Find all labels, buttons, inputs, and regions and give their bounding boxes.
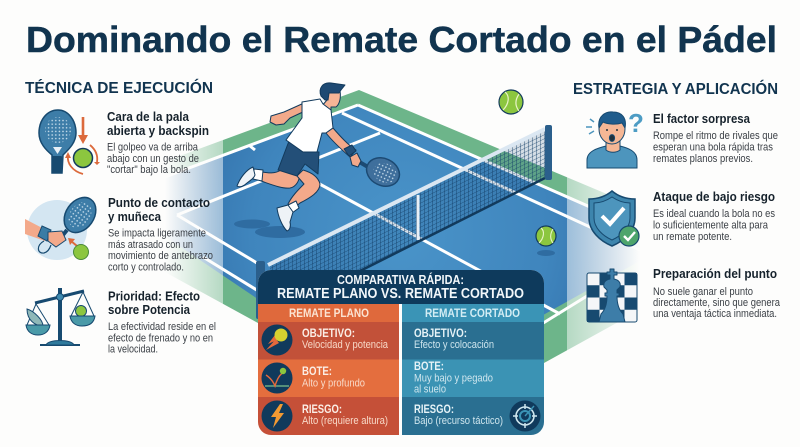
text: preparación del punto: Preparación del punto bbox=[653, 266, 777, 281]
icon: balance scale bbox=[26, 288, 95, 345]
racket bbox=[356, 153, 404, 191]
text: el factor sorpresa: Rompe el ritmo de rivales que bbox=[653, 130, 778, 142]
text: cara de la pala: El golpeo va de arriba bbox=[107, 142, 199, 154]
row: riesgo cortado: Bajo (recurso táctico) bbox=[414, 415, 503, 427]
row: bote cortado: al suelo bbox=[414, 384, 446, 396]
text: prioridad: efecto de frenado y no en bbox=[108, 332, 213, 344]
panel: comparison table bbox=[258, 270, 544, 435]
text: preparación del punto: una ventaja táctica inmediata. bbox=[653, 308, 777, 320]
hand bbox=[350, 153, 361, 167]
back leg bbox=[261, 170, 299, 188]
text: cara de la pala: "cortar" bajo la bola. bbox=[107, 164, 191, 176]
hair bbox=[320, 83, 345, 100]
wristband bbox=[344, 145, 356, 156]
icon: shield with check bbox=[589, 191, 639, 246]
panel heading: REMATE PLANO VS. REMATE CORTADO bbox=[277, 286, 524, 302]
court background bbox=[170, 90, 634, 363]
row: riesgo cortado: RIESGO: bbox=[414, 404, 454, 416]
row: objetivo plano: OBJETIVO: bbox=[302, 328, 355, 340]
row: riesgo plano bbox=[262, 400, 388, 432]
text: cara de la pala: abajo con un gesto de bbox=[107, 153, 199, 165]
icon: racket and backspin bbox=[39, 110, 100, 174]
icon: contact point and wrist bbox=[25, 191, 102, 260]
text: punto de contacto: Se impacta ligeramente bbox=[108, 228, 206, 240]
text: prioridad bbox=[108, 288, 216, 356]
neck and face bbox=[321, 90, 340, 112]
row: bote cortado: BOTE: bbox=[414, 361, 444, 373]
text: el factor sorpresa: El factor sorpresa bbox=[653, 111, 751, 126]
panel heading bbox=[277, 272, 524, 302]
text: ataque de bajo riesgo bbox=[653, 189, 775, 243]
title: Dominando el Remate Cortado en el Pádel bbox=[26, 19, 777, 60]
player shadow bbox=[234, 220, 305, 238]
row: bote cortado bbox=[414, 361, 493, 396]
row: objetivo plano bbox=[262, 324, 389, 356]
text: prioridad: la velocidad. bbox=[108, 344, 158, 356]
row: bote plano: BOTE: bbox=[302, 366, 332, 378]
text: punto de contacto: movimiento de antebrazo bbox=[108, 250, 213, 262]
row: bote plano bbox=[262, 362, 365, 394]
front leg bbox=[288, 170, 320, 208]
back arm bbox=[270, 103, 305, 125]
text: el factor sorpresa: remates planos previos. bbox=[653, 153, 753, 165]
heading: técnica de ejecución: TÉCNICA DE EJECUCIÓN bbox=[25, 79, 213, 97]
shirt bbox=[286, 99, 333, 152]
shorts bbox=[278, 141, 319, 176]
icon: surprised person bbox=[586, 108, 644, 168]
net bbox=[256, 125, 552, 319]
row: bote plano: Alto y profundo bbox=[302, 378, 365, 390]
player bbox=[237, 83, 404, 231]
text: prioridad: La efectividad reside en el bbox=[108, 321, 216, 333]
text: punto de contacto bbox=[108, 195, 213, 274]
column heading: remate plano: REMATE PLANO bbox=[289, 308, 369, 320]
text: punto de contacto: Punto de contacto bbox=[108, 195, 210, 210]
text: ataque de bajo riesgo: lo suficientemente alta para bbox=[653, 220, 769, 232]
icon: chess king on board bbox=[587, 269, 637, 322]
text: ataque de bajo riesgo: Ataque de bajo riesgo bbox=[653, 189, 775, 204]
text: cara de la pala: Cara de la pala bbox=[107, 109, 190, 124]
row: objetivo cortado: Efecto y colocación bbox=[414, 339, 494, 351]
text: prioridad: sobre Potencia bbox=[108, 302, 191, 317]
text: cara de la pala bbox=[107, 109, 209, 176]
icon: surprised person: ? bbox=[628, 108, 644, 138]
icon: tennis ball top right bbox=[499, 90, 523, 114]
text: ataque de bajo riesgo: Es ideal cuando la bola no es bbox=[653, 208, 775, 220]
row: riesgo plano: Alto (requiere altura) bbox=[302, 415, 388, 427]
text: el factor sorpresa bbox=[653, 111, 778, 165]
row: objetivo cortado bbox=[414, 328, 494, 351]
icon: tennis ball low right bbox=[536, 226, 556, 256]
row: riesgo plano: RIESGO: bbox=[302, 404, 342, 416]
row: objetivo cortado: OBJETIVO: bbox=[414, 328, 467, 340]
heading: estrategia y aplicación: ESTRATEGIA Y APLICACIÓN bbox=[573, 80, 778, 98]
front arm bbox=[326, 128, 356, 157]
text: ataque de bajo riesgo: un remate potente. bbox=[653, 231, 732, 243]
column heading: remate cortado: REMATE CORTADO bbox=[425, 308, 520, 320]
text: prioridad: Prioridad: Efecto bbox=[108, 288, 200, 304]
row: riesgo cortado bbox=[414, 404, 503, 427]
text: punto de contacto: y muñeca bbox=[108, 209, 162, 224]
text: preparación del punto bbox=[653, 266, 781, 320]
icon: target bbox=[510, 400, 540, 432]
text: punto de contacto: más atrasado con un bbox=[108, 239, 193, 251]
row: bote cortado: Muy bajo y pegado bbox=[414, 372, 493, 384]
text: cara de la pala: abierta y backspin bbox=[107, 123, 209, 138]
text: preparación del punto: No suele ganar el punto bbox=[653, 286, 753, 298]
row: objetivo plano: Velocidad y potencia bbox=[302, 339, 389, 351]
panel heading: COMPARATIVA RÁPIDA: bbox=[337, 272, 464, 287]
text: el factor sorpresa: esperan una bola rápida tras bbox=[653, 142, 773, 154]
text: punto de contacto: corto y controlado. bbox=[108, 262, 184, 274]
